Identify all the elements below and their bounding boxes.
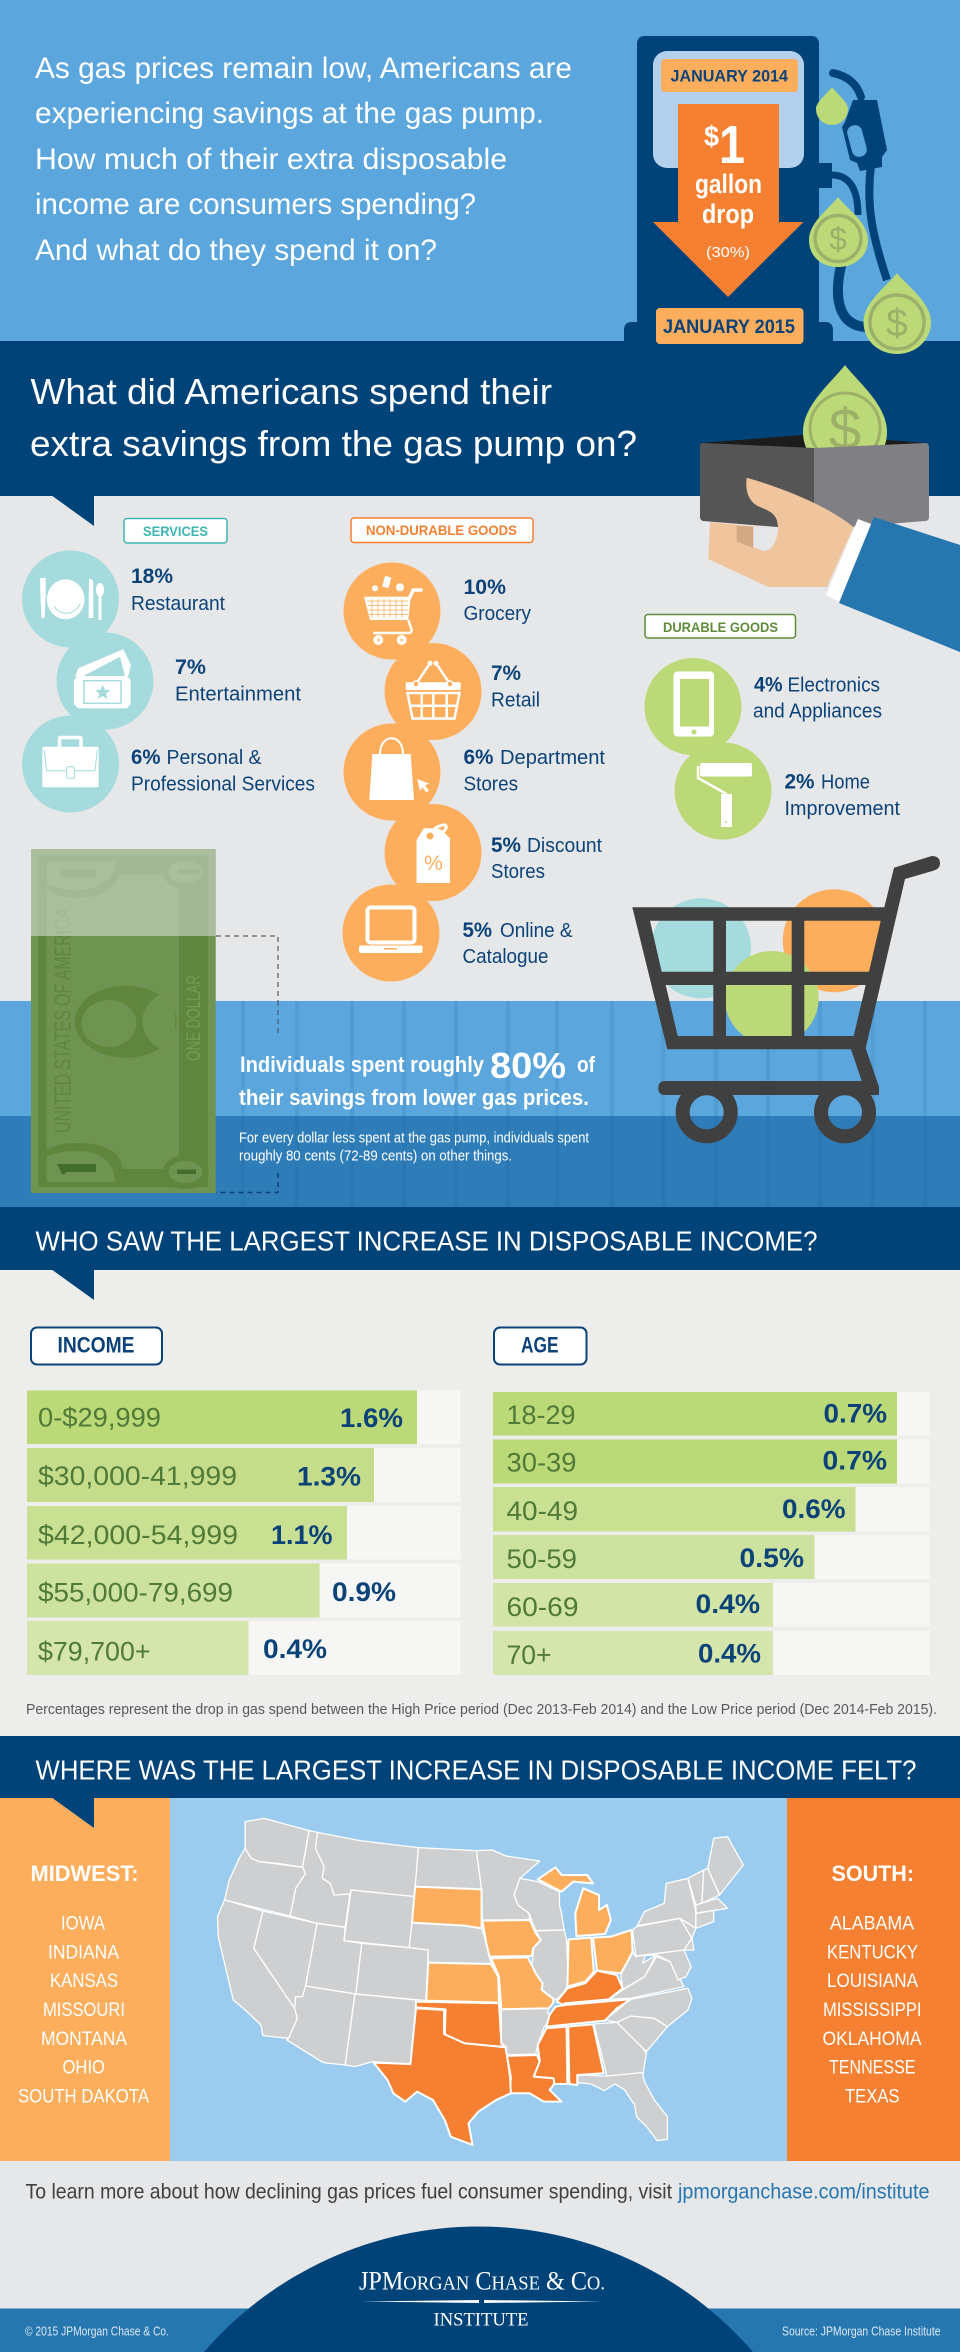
bar: 79,700 plus: $79,700+ xyxy=(38,1636,150,1666)
heading: where was the largest increase xyxy=(0,1736,960,1798)
panel: midwest: OHIO xyxy=(62,2056,105,2078)
item: entertainment: Entertainment xyxy=(175,684,301,706)
pump screen xyxy=(653,51,804,168)
label: January 2014: JANUARY 2014 xyxy=(670,66,789,86)
chart: income xyxy=(27,1328,460,1675)
callout: 80 percent: their savings from lower gas prices. xyxy=(239,1085,589,1110)
bar: 18-29: 18-29 xyxy=(506,1400,576,1430)
callout: 80 percent xyxy=(239,1045,596,1164)
heading: what did Americans spend: What did Americans spend their xyxy=(30,371,552,412)
panel: 80 percent background xyxy=(0,1001,960,1207)
item: home improvement: Home xyxy=(821,772,870,794)
panel: south: MISSISSIPPI xyxy=(823,1999,922,2021)
item: retail: 7% xyxy=(491,662,521,685)
gas pump illustration xyxy=(624,36,931,354)
icon: dollar bill: UNITED STATES OF AMERICA xyxy=(50,908,76,1133)
bar: 60-69: 0.4% xyxy=(696,1589,760,1619)
item: department stores: Department xyxy=(500,747,605,769)
item: personal and professional services: 6% xyxy=(131,746,161,769)
icon: dollar drop small: $ xyxy=(829,221,847,257)
pump body xyxy=(637,36,819,341)
intro text: And what do they spend it on? xyxy=(35,234,437,267)
map background xyxy=(170,1798,787,2161)
intro text: income are consumers spending? xyxy=(35,188,476,221)
header background xyxy=(0,0,960,341)
cuff xyxy=(826,519,871,602)
hand xyxy=(708,478,854,587)
panel: midwest: IOWA xyxy=(61,1912,105,1934)
panel: south: ALABAMA xyxy=(830,1912,914,1934)
bar: 30,000-41,999 xyxy=(27,1448,460,1502)
item: personal and professional services: Professional Services xyxy=(131,774,315,796)
item: personal and professional services xyxy=(22,716,315,812)
panel: midwest: INDIANA xyxy=(48,1942,119,1964)
item: department stores: 6% xyxy=(464,746,494,769)
item: home improvement: 2% xyxy=(784,770,815,794)
label: durable goods xyxy=(645,614,796,638)
panel: non-durable goods xyxy=(342,518,605,982)
item: electronics and appliances xyxy=(644,658,882,755)
item: online and catalogue: Catalogue xyxy=(462,946,548,968)
logo: JPMorgan Chase Institute xyxy=(359,2266,605,2330)
intro text: experiencing savings at the gas pump. xyxy=(35,97,544,130)
item: department stores xyxy=(344,724,605,820)
bar: 42,000-54,999 xyxy=(27,1506,460,1560)
label: age: AGE xyxy=(521,1332,558,1358)
item: personal and professional services: Personal & xyxy=(166,747,262,769)
icon: dollar drop small xyxy=(809,197,868,267)
item: electronics and appliances: Electronics xyxy=(788,674,880,696)
label: services: SERVICES xyxy=(143,523,208,539)
bar: 40-49 xyxy=(493,1487,930,1532)
bar: 0-29,999: 1.6% xyxy=(340,1403,403,1433)
arrow: one dollar gallon drop: (30%) xyxy=(706,244,750,261)
callout tail xyxy=(51,1797,94,1828)
sleeve xyxy=(839,517,960,652)
bar: 40-49: 40-49 xyxy=(506,1496,578,1526)
label: non-durable goods xyxy=(351,518,533,542)
bar: 30,000-41,999: 1.3% xyxy=(297,1462,361,1492)
item: retail xyxy=(384,643,540,740)
heading: who saw the largest increase xyxy=(0,1207,960,1270)
bar: 0-29,999: 0-$29,999 xyxy=(38,1402,161,1432)
bar: 70 plus: 70+ xyxy=(506,1640,552,1670)
item: restaurant xyxy=(22,550,225,648)
bar: 70 plus xyxy=(493,1631,930,1675)
item: online and catalogue: Online & xyxy=(500,920,573,942)
map: United States xyxy=(217,1818,743,2145)
bar: 30-39: 0.7% xyxy=(822,1446,887,1476)
item: restaurant: Restaurant xyxy=(131,593,225,615)
arrow: one dollar gallon drop: drop xyxy=(702,199,754,229)
wallet and hand illustration xyxy=(700,365,960,652)
bar: 79,700 plus xyxy=(27,1621,460,1675)
bar: 18-29 xyxy=(493,1392,930,1436)
icon: plain drop xyxy=(816,87,848,125)
bar: 42,000-54,999: $42,000-54,999 xyxy=(38,1520,238,1550)
arrow: one dollar gallon drop: $ xyxy=(704,121,719,153)
panel: south: SOUTH: xyxy=(832,1861,914,1886)
panel: south: KENTUCKY xyxy=(827,1942,918,1964)
bar: 60-69 xyxy=(493,1583,930,1626)
item: discount stores: Stores xyxy=(491,861,545,883)
call to action: To learn more about how declining gas prices fuel consumer spending, visit xyxy=(26,2180,672,2204)
item: discount stores: 5% xyxy=(491,834,521,857)
pump hose and nozzle xyxy=(832,73,887,327)
intro text xyxy=(35,52,572,267)
panel: south: OKLAHOMA xyxy=(822,2028,922,2050)
bar: 50-59 xyxy=(493,1535,930,1579)
callout: 80 percent: 80% xyxy=(490,1045,566,1086)
item: retail: Retail xyxy=(491,690,540,712)
intro text: As gas prices remain low, Americans are xyxy=(35,52,572,85)
bar: 40-49: 0.6% xyxy=(782,1494,846,1524)
label: income xyxy=(31,1328,162,1364)
footer bar xyxy=(0,2308,960,2352)
label: income: INCOME xyxy=(58,1332,134,1358)
item: grocery: 10% xyxy=(464,576,506,599)
callout: 80 percent: of xyxy=(577,1052,596,1077)
call to action: jpmorganchase.com/institute xyxy=(677,2180,930,2204)
bar: 42,000-54,999: 1.1% xyxy=(271,1520,332,1550)
label: January 2014 xyxy=(661,59,798,92)
panel: midwest: MISSOURI xyxy=(43,1999,125,2021)
bar: 18-29: 0.7% xyxy=(824,1398,887,1428)
item: grocery xyxy=(344,562,531,660)
section: disposable income background xyxy=(0,1270,960,1736)
section band: spending heading xyxy=(0,341,960,496)
item: electronics and appliances: and Appliances xyxy=(753,700,882,722)
item: entertainment: 7% xyxy=(175,656,206,679)
corner medallions xyxy=(47,861,115,890)
heading: what did Americans spend: extra savings from the gas pump on? xyxy=(30,423,637,464)
item: electronics and appliances: 4% xyxy=(754,674,783,696)
shopping cart balls xyxy=(651,889,886,1045)
item: department stores: Stores xyxy=(464,774,518,796)
midwest states xyxy=(412,1867,633,2009)
icon: dollar bill xyxy=(31,849,216,1193)
central portrait xyxy=(75,986,177,1058)
panel: midwest: MONTANA xyxy=(41,2028,127,2050)
bar: 30-39 xyxy=(493,1440,930,1484)
item: home improvement: Improvement xyxy=(784,798,900,820)
bar: 70 plus: 0.4% xyxy=(698,1638,761,1668)
south states xyxy=(374,1971,631,2145)
dashed bracket xyxy=(216,936,278,1192)
bar: 55,000-79,699: $55,000-79,699 xyxy=(38,1578,233,1608)
label: services xyxy=(124,518,227,543)
dollar drop in wallet xyxy=(803,365,887,463)
item: restaurant: 18% xyxy=(131,565,173,588)
dollar drop in wallet: $ xyxy=(829,397,861,462)
panel: midwest: MIDWEST: xyxy=(30,1861,138,1886)
icon: dollar drop large: $ xyxy=(886,302,908,345)
item: entertainment xyxy=(56,632,301,730)
wallet opening xyxy=(700,435,927,449)
bar: 55,000-79,699: 0.9% xyxy=(332,1577,396,1607)
label: age xyxy=(494,1328,586,1364)
item: online and catalogue: 5% xyxy=(462,919,492,942)
heading: what did Americans spend xyxy=(30,371,637,464)
callout tail xyxy=(51,495,94,526)
arrow: one dollar gallon drop: 1 xyxy=(719,115,745,175)
item: discount stores: Discount xyxy=(527,835,602,857)
panel: south: LOUISIANA xyxy=(827,1970,918,1992)
arrow: one dollar gallon drop xyxy=(653,104,804,297)
spent portion overlay xyxy=(31,849,216,936)
chart: age xyxy=(493,1328,930,1675)
wallet xyxy=(814,443,929,530)
shopping cart xyxy=(632,856,940,1136)
item: home improvement xyxy=(674,742,900,840)
panel: midwest xyxy=(0,1798,170,2161)
panel: services xyxy=(22,518,315,812)
panel: south xyxy=(787,1798,960,2161)
panel: midwest: KANSAS xyxy=(50,1970,118,1992)
label: non-durable goods: NON-DURABLE GOODS xyxy=(366,522,517,538)
heading: who saw the largest increase: WHO SAW THE LARGEST INCREASE IN DISPOSABLE INCOME? xyxy=(36,1226,818,1256)
intro text: How much of their extra disposable xyxy=(35,143,507,176)
bar: 30,000-41,999: $30,000-41,999 xyxy=(38,1461,237,1491)
footer arc xyxy=(204,2227,753,2352)
bar: 30-39: 30-39 xyxy=(506,1448,576,1478)
panel: midwest: SOUTH DAKOTA xyxy=(18,2086,149,2108)
bar: 55,000-79,699 xyxy=(27,1564,460,1618)
label: January 2015: JANUARY 2015 xyxy=(663,317,795,338)
callout: 80 percent: For every dollar less spent at the gas pump, individuals spent xyxy=(239,1130,589,1146)
item: discount stores: % xyxy=(424,852,443,875)
panel: durable goods xyxy=(644,614,900,840)
panel: south: TENNESSE xyxy=(829,2056,916,2078)
callout: 80 percent: Individuals spent roughly xyxy=(240,1052,485,1077)
arrow: one dollar gallon drop: gallon xyxy=(695,169,762,199)
panel: south: TEXAS xyxy=(845,2086,900,2108)
callout: 80 percent: roughly 80 cents (72-89 cents) on other things. xyxy=(239,1148,512,1164)
item: discount stores xyxy=(384,804,602,901)
label: durable goods: DURABLE GOODS xyxy=(663,619,778,635)
icon: dollar bill: ONE DOLLAR xyxy=(183,975,205,1061)
bar: 60-69: 60-69 xyxy=(506,1592,578,1622)
bar: 79,700 plus: 0.4% xyxy=(263,1634,327,1664)
copyright: © 2015 JPMorgan Chase & Co. xyxy=(25,2324,169,2338)
icon: dollar drop large xyxy=(864,273,931,354)
footnote: Percentages represent the drop in gas spend between the High Price period (Dec 2013-Feb 2014) and the Low Price period (Dec 2014-Feb 2015). xyxy=(26,1702,937,1718)
item: grocery: Grocery xyxy=(464,603,531,625)
bar: 50-59: 0.5% xyxy=(740,1543,804,1573)
logo: JPMorgan Chase Institute: INSTITUTE xyxy=(434,2310,528,2330)
logo: JPMorgan Chase Institute: JPMORGAN CHASE & CO. xyxy=(359,2266,605,2296)
label: January 2015 xyxy=(656,308,804,344)
bar: 0-29,999 xyxy=(27,1390,460,1444)
bar: 50-59: 50-59 xyxy=(506,1544,577,1574)
callout tail xyxy=(51,1269,94,1300)
item: online and catalogue xyxy=(342,884,573,982)
